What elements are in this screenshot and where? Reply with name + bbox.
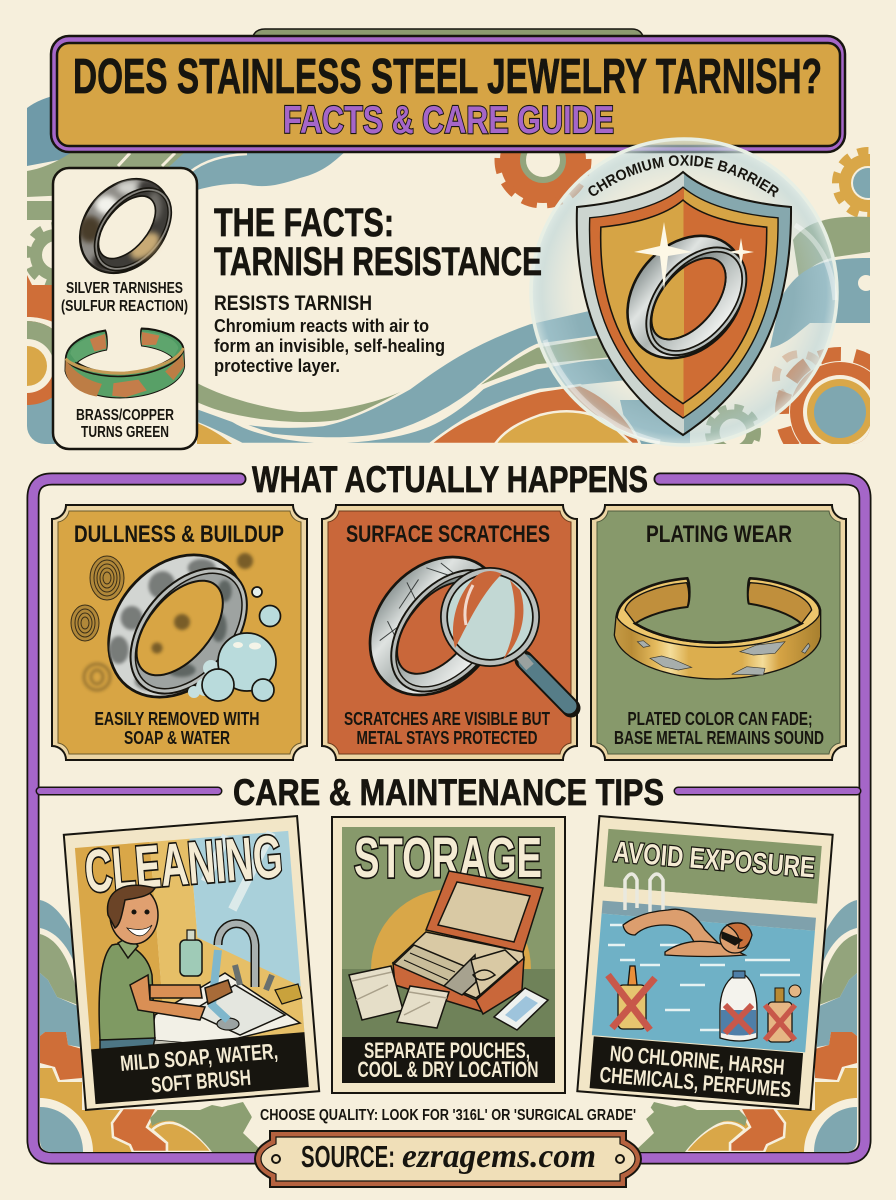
icon: green brass cuff <box>63 326 186 400</box>
caption: NO CHLORINE, HARSH <box>609 1041 785 1080</box>
top tab <box>253 29 643 36</box>
panel: lower background <box>40 900 857 1152</box>
caption line 2: SOAP & WATER <box>124 727 230 748</box>
text block: the facts: THE FACTS: <box>214 201 394 245</box>
ribbon: choose quality <box>246 1104 654 1135</box>
poster title: CLEANING <box>82 822 285 905</box>
caption line 2: CHEMICALS, PERFUMES <box>599 1062 792 1102</box>
label: silver: SILVER TARNISHES <box>66 280 183 297</box>
panel: cleaning poster <box>64 816 319 1110</box>
card title: SURFACE SCRATCHES <box>346 521 550 548</box>
sink counter <box>150 973 300 1052</box>
panel: surface scratches <box>322 505 577 760</box>
person <box>99 885 232 1055</box>
worn gold cuff <box>615 578 820 678</box>
caption line 2: SOFT BRUSH <box>150 1065 252 1098</box>
heading: what actually happens: WHAT ACTUALLY HAPPENS <box>252 459 648 500</box>
panel: avoid exposure poster <box>577 816 833 1110</box>
label: brass result: TURNS GREEN <box>81 424 169 441</box>
water stream <box>212 950 228 1020</box>
panel: plating wear <box>591 505 846 760</box>
pool ladder <box>625 874 663 912</box>
sparkles <box>634 222 754 290</box>
caption line 2: BASE METAL REMAINS SOUND <box>614 727 824 748</box>
card title: DULLNESS & BUILDUP <box>74 521 284 548</box>
soap bubbles <box>188 587 280 701</box>
ribbon: choose quality: CHOOSE QUALITY: LOOK FOR '316L' OR 'SURGICAL GRADE' <box>260 1107 636 1124</box>
faucet <box>218 924 255 987</box>
caption: MILD SOAP, WATER, <box>119 1038 279 1076</box>
panel frame: what actually happens / care tips <box>33 479 865 1158</box>
caption line 2: COOL & DRY LOCATION <box>358 1057 538 1082</box>
caption: SEPARATE POUCHES, <box>364 1038 530 1063</box>
plaque: source: ezragems.com <box>402 1138 596 1175</box>
panel: comparison metals <box>53 161 197 449</box>
pouch left <box>349 966 403 1020</box>
water ripples <box>608 925 800 1030</box>
caption: PLATED COLOR CAN FADE; <box>628 708 812 729</box>
faucet metal <box>218 924 255 987</box>
card title: PLATING WEAR <box>646 521 792 548</box>
icon: chromium shield in bubble <box>530 137 839 446</box>
panel: title banner <box>51 36 845 152</box>
caption: SCRATCHES ARE VISIBLE BUT <box>344 708 551 729</box>
caption line 2: METAL STAYS PROTECTED <box>356 727 538 748</box>
text block: the facts: RESISTS TARNISH <box>214 292 372 315</box>
panel: facts background <box>27 96 870 444</box>
soap bottle <box>180 930 202 976</box>
icon: tarnished silver ring <box>78 178 172 274</box>
sponge <box>275 984 302 1004</box>
text block: the facts: TARNISH RESISTANCE <box>214 240 542 284</box>
text block: the facts: Chromium reacts with air to <box>214 315 429 336</box>
label: brass: BRASS/COPPER <box>76 407 174 424</box>
swimmer <box>623 909 752 956</box>
plaque: source: SOURCE: <box>301 1139 395 1174</box>
shield <box>577 172 791 435</box>
ring with smudges <box>107 554 248 698</box>
heading: care and maintenance: CARE & MAINTENANCE TIPS <box>233 772 664 813</box>
subtitle: FACTS & CARE GUIDE <box>283 99 614 142</box>
text block: the facts <box>214 201 542 376</box>
jewelry box <box>393 871 543 1014</box>
text block: the facts: form an invisible, self-healing <box>214 335 445 356</box>
panel: storage poster <box>332 817 565 1093</box>
scratched ring <box>343 531 529 721</box>
poster title: AVOID EXPOSURE <box>612 836 816 884</box>
pouch right <box>397 986 449 1028</box>
text block: the facts: protective layer. <box>214 355 340 376</box>
dust specks <box>152 614 190 654</box>
shield ring <box>626 234 748 360</box>
magnifying glass <box>444 571 571 708</box>
desiccant packet <box>494 988 548 1030</box>
fingerprints <box>71 556 124 690</box>
label: silver reason: (SULFUR REACTION) <box>61 298 188 315</box>
crossed bottle <box>608 966 655 1030</box>
poster title: STORAGE <box>354 826 542 890</box>
plaque: source <box>255 1131 641 1187</box>
curved label: CHROMIUM OXIDE BARRIER <box>588 155 779 198</box>
faucet handles <box>235 965 272 990</box>
panel: dullness and buildup <box>52 505 307 760</box>
crossed bleach <box>720 971 757 1041</box>
crossed perfume <box>765 985 801 1042</box>
dust <box>237 553 253 569</box>
caption: EASILY REMOVED WITH <box>94 708 260 729</box>
